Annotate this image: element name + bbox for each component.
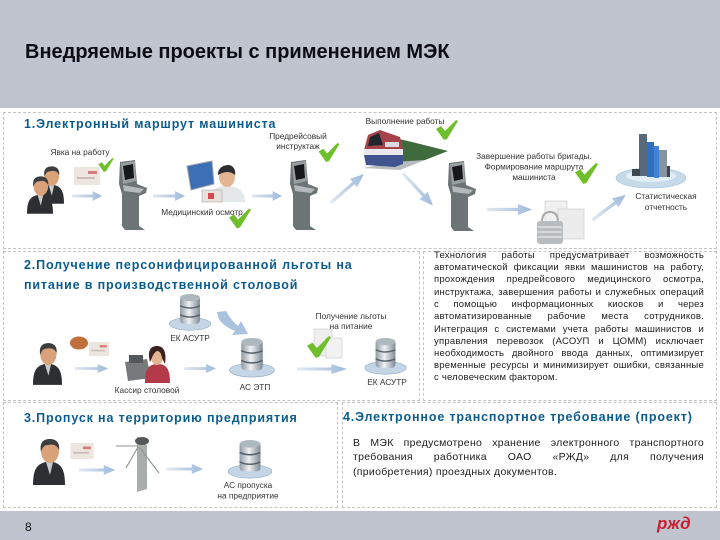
panel: enterprise pass [3, 402, 338, 508]
project 4 text: В МЭК предусмотрено хранение электронного транспортного [353, 437, 704, 449]
heading 3: 3.Пропуск на территорию предприятия [24, 411, 298, 425]
icon: db access system [228, 440, 272, 478]
description text: инструктажа, завершения работы и служебных операций [434, 287, 704, 298]
description text: Технология работы предусматривает возможность [434, 250, 704, 261]
panel: description [423, 251, 717, 401]
icon: train [363, 130, 448, 170]
label: cashier: Кассир столовой [115, 385, 180, 395]
label: statistics: отчетность [645, 202, 687, 212]
arrow [79, 465, 115, 475]
header band [0, 0, 720, 108]
logo: ржд [657, 514, 691, 533]
panel 2 flow [33, 294, 407, 395]
panel: electronic travel requirement [342, 402, 717, 508]
label: card system 2: ЕК АСУТР [367, 377, 407, 387]
heading 1: 1.Электронный маршрут машиниста [24, 117, 276, 131]
arrow: curved to etp [217, 311, 248, 335]
description text: автоматизированные рабочие места сотрудников. [434, 311, 704, 322]
description text: с человеческим фактором. [434, 372, 558, 383]
arrow [487, 204, 532, 215]
label: shift completion: машиниста [512, 172, 556, 182]
icon: doctor [187, 161, 245, 202]
project 4 text [353, 437, 704, 478]
label: pre-trip briefing: Предрейсовый [269, 131, 327, 141]
description text: прохождения предрейсового медицинского осмотра, [434, 274, 704, 285]
panel: electronic route [3, 112, 717, 249]
icon: food [70, 336, 88, 350]
project 4 text: требования работника ОАО «РЖД» для получения [353, 451, 704, 463]
icon: turnstile [116, 437, 159, 492]
description text: Интеграция с системами учета работы машинистов и [434, 324, 704, 334]
description text: управления перевозок (АСОУП и ЦОММ) исключает [434, 336, 704, 347]
icon: cashier [125, 346, 170, 383]
panel 3 flow [33, 437, 279, 500]
label: shift completion: Завершение работы бригады. [476, 151, 592, 161]
arrow [297, 364, 347, 374]
footer band [0, 511, 720, 540]
heading 2: питание в производственной столовой [24, 278, 298, 292]
label: work execution: Выполнение работы [366, 116, 444, 126]
label: card system: ЕК АСУТР [170, 333, 210, 343]
arrow [589, 190, 629, 225]
icon: two drivers [27, 166, 64, 214]
page number: 8 [25, 520, 32, 534]
arrow [75, 364, 108, 373]
icon: db card system [169, 294, 211, 330]
icon: pass card [70, 443, 94, 459]
icon: kiosk 3 [448, 161, 476, 231]
icon: check briefing [319, 143, 339, 162]
arrow [72, 191, 102, 201]
icon: statistics [616, 134, 686, 188]
icon: check attendance [98, 158, 114, 172]
description text: с помощью информационных киосков и через [434, 299, 704, 310]
heading 2 [24, 258, 353, 292]
icon: locked documents [537, 201, 584, 244]
label: access system: на предприятие [217, 490, 279, 500]
icon: db etp [230, 338, 274, 377]
description text: необходимость двойного ввода данных, оптимизирует [434, 348, 704, 359]
icon: cards [74, 167, 100, 185]
label: statistics: Статистическая [635, 191, 697, 201]
icon: check completion [575, 163, 598, 184]
icon: employee [33, 343, 62, 385]
arrow [153, 191, 185, 201]
panel: personified benefit [3, 251, 420, 401]
icon: kiosk 2 [290, 160, 318, 230]
project 4 text: (приобретения) проездных документов. [353, 466, 557, 478]
arrow [167, 464, 203, 474]
arrow [184, 364, 216, 373]
label: attendance: Явка на работу [50, 147, 110, 157]
title: Внедряемые проекты с применением МЭК [25, 41, 450, 63]
icon: check execution [436, 120, 458, 140]
label: pre-trip briefing: инструктаж [276, 141, 320, 151]
description text [434, 250, 704, 383]
label: medical check: Медицинский осмотр [161, 207, 243, 217]
heading 2: 2.Получение персонифицированной льготы на [24, 258, 353, 272]
icon: document with check [307, 329, 342, 358]
description text: временные ресурсы и минимизирует ошибки, связанные [434, 360, 704, 371]
panel 1 flow [27, 116, 697, 244]
arrow [252, 191, 282, 201]
icon: kiosk 1 [119, 160, 147, 230]
icon: employee [33, 439, 65, 485]
arrow [327, 170, 368, 207]
icon: check medical [229, 208, 251, 228]
arrow [399, 170, 437, 209]
description text: автоматической фиксации явки машинистов на работу, [434, 262, 704, 273]
label: shift completion: Формирование маршрута [485, 162, 584, 172]
label: etp: АС ЭТП [240, 382, 270, 392]
label: access system: АС пропуска [224, 480, 272, 490]
label: benefit received: Получение льготы [316, 311, 386, 321]
heading 4: 4.Электронное транспортное требование (проект) [343, 410, 693, 424]
icon: db card system 2 [365, 338, 406, 374]
icon: benefit card [89, 342, 109, 356]
label: benefit received: на питание [330, 321, 373, 331]
